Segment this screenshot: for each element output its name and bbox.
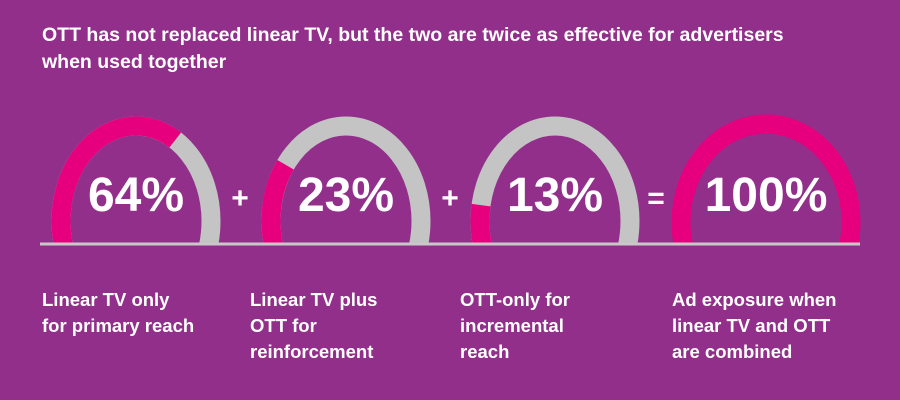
label 4: Ad exposure when xyxy=(672,289,836,310)
ring 100% xyxy=(672,114,860,242)
label 1: for primary reach xyxy=(42,315,194,336)
label 2: reinforcement xyxy=(250,341,373,362)
label 1 xyxy=(42,289,194,336)
label 2 xyxy=(250,289,377,362)
numbers: 13% xyxy=(507,169,603,222)
ring 13% xyxy=(470,116,640,242)
label 3: OTT-only for xyxy=(460,289,570,310)
label 3: reach xyxy=(460,341,509,362)
label 3 xyxy=(460,289,570,362)
ring 64% xyxy=(52,116,220,242)
label 4: linear TV and OTT xyxy=(672,315,830,336)
label 3: incremental xyxy=(460,315,564,336)
numbers: + xyxy=(231,182,249,215)
chart: rings xyxy=(40,114,860,246)
ring 23% xyxy=(262,116,430,242)
label 4: are combined xyxy=(672,341,792,362)
numbers xyxy=(88,169,827,222)
numbers: 64% xyxy=(88,169,184,222)
label 4 xyxy=(672,289,836,362)
label 1: Linear TV only xyxy=(42,289,169,310)
numbers: + xyxy=(441,182,459,215)
numbers: 100% xyxy=(705,169,827,222)
label 2: Linear TV plus xyxy=(250,289,377,310)
label 2: OTT for xyxy=(250,315,317,336)
numbers: 23% xyxy=(298,169,394,222)
title: OTT has not replaced linear TV, but the two are twice as effective for advertisers when used together xyxy=(42,24,784,73)
numbers: = xyxy=(647,182,665,215)
